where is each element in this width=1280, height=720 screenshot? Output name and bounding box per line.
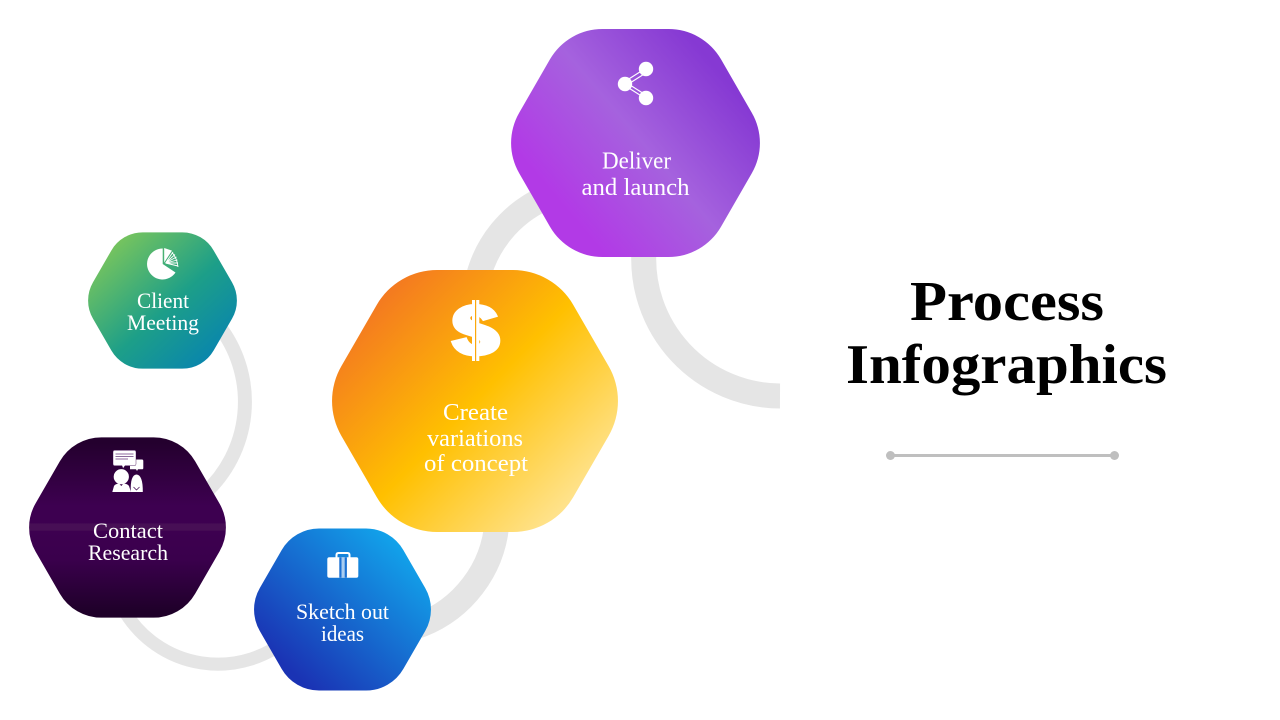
arc: Contact to Sketch: [125, 612, 290, 664]
icon: pie chart: [147, 248, 178, 279]
title: Process: [910, 271, 1104, 333]
text: Sketch out ideas: [296, 599, 389, 646]
arc: Create to Deliver: [477, 198, 545, 282]
panel: Deliver and launch: [511, 29, 760, 257]
text: Client Meeting: Client: [137, 288, 189, 313]
arc: Deliver to right edge: [644, 250, 780, 396]
hexagon: Deliver: [511, 29, 760, 257]
text: Deliver and launch: Deliver: [602, 148, 671, 174]
text: Create variations of concept: variations: [427, 426, 523, 452]
text: Sketch out ideas: Sketch out: [296, 599, 389, 624]
icon: people talking: [112, 450, 143, 492]
text: Deliver and launch: and launch: [582, 175, 690, 201]
text: Contact Research: Research: [88, 540, 168, 565]
title underline divider: [886, 451, 1119, 460]
panel: Contact Research: [29, 437, 226, 618]
panel: Create variations of concept: [332, 270, 618, 532]
title: [846, 271, 1167, 396]
icon: suitcase: [327, 553, 358, 578]
panel: Client Meeting: [88, 232, 237, 369]
connector arcs: [125, 198, 780, 664]
hexagon: Create: [332, 270, 618, 532]
icon: dollar sign: [452, 300, 499, 361]
hexagon: Contact: [29, 437, 226, 618]
arc: Client to Contact: [205, 330, 245, 493]
text: Contact Research: [88, 518, 168, 565]
arc: Sketch to Create: [418, 522, 497, 626]
text: Sketch out ideas: ideas: [321, 621, 364, 646]
title: Infographics: [846, 334, 1167, 396]
icon: share: [618, 62, 653, 105]
panel: Sketch out ideas: [254, 528, 431, 691]
text: Client Meeting: Meeting: [127, 310, 199, 335]
text: Create variations of concept: of concept: [424, 451, 528, 477]
text: Contact Research: Contact: [93, 518, 163, 543]
text: Client Meeting: [127, 288, 199, 335]
text: Create variations of concept: Create: [443, 400, 508, 426]
text: Deliver and launch: [582, 148, 690, 201]
text: Create variations of concept: [424, 400, 528, 477]
hexagon: Client: [88, 232, 237, 369]
hexagon: Sketch: [254, 528, 431, 691]
